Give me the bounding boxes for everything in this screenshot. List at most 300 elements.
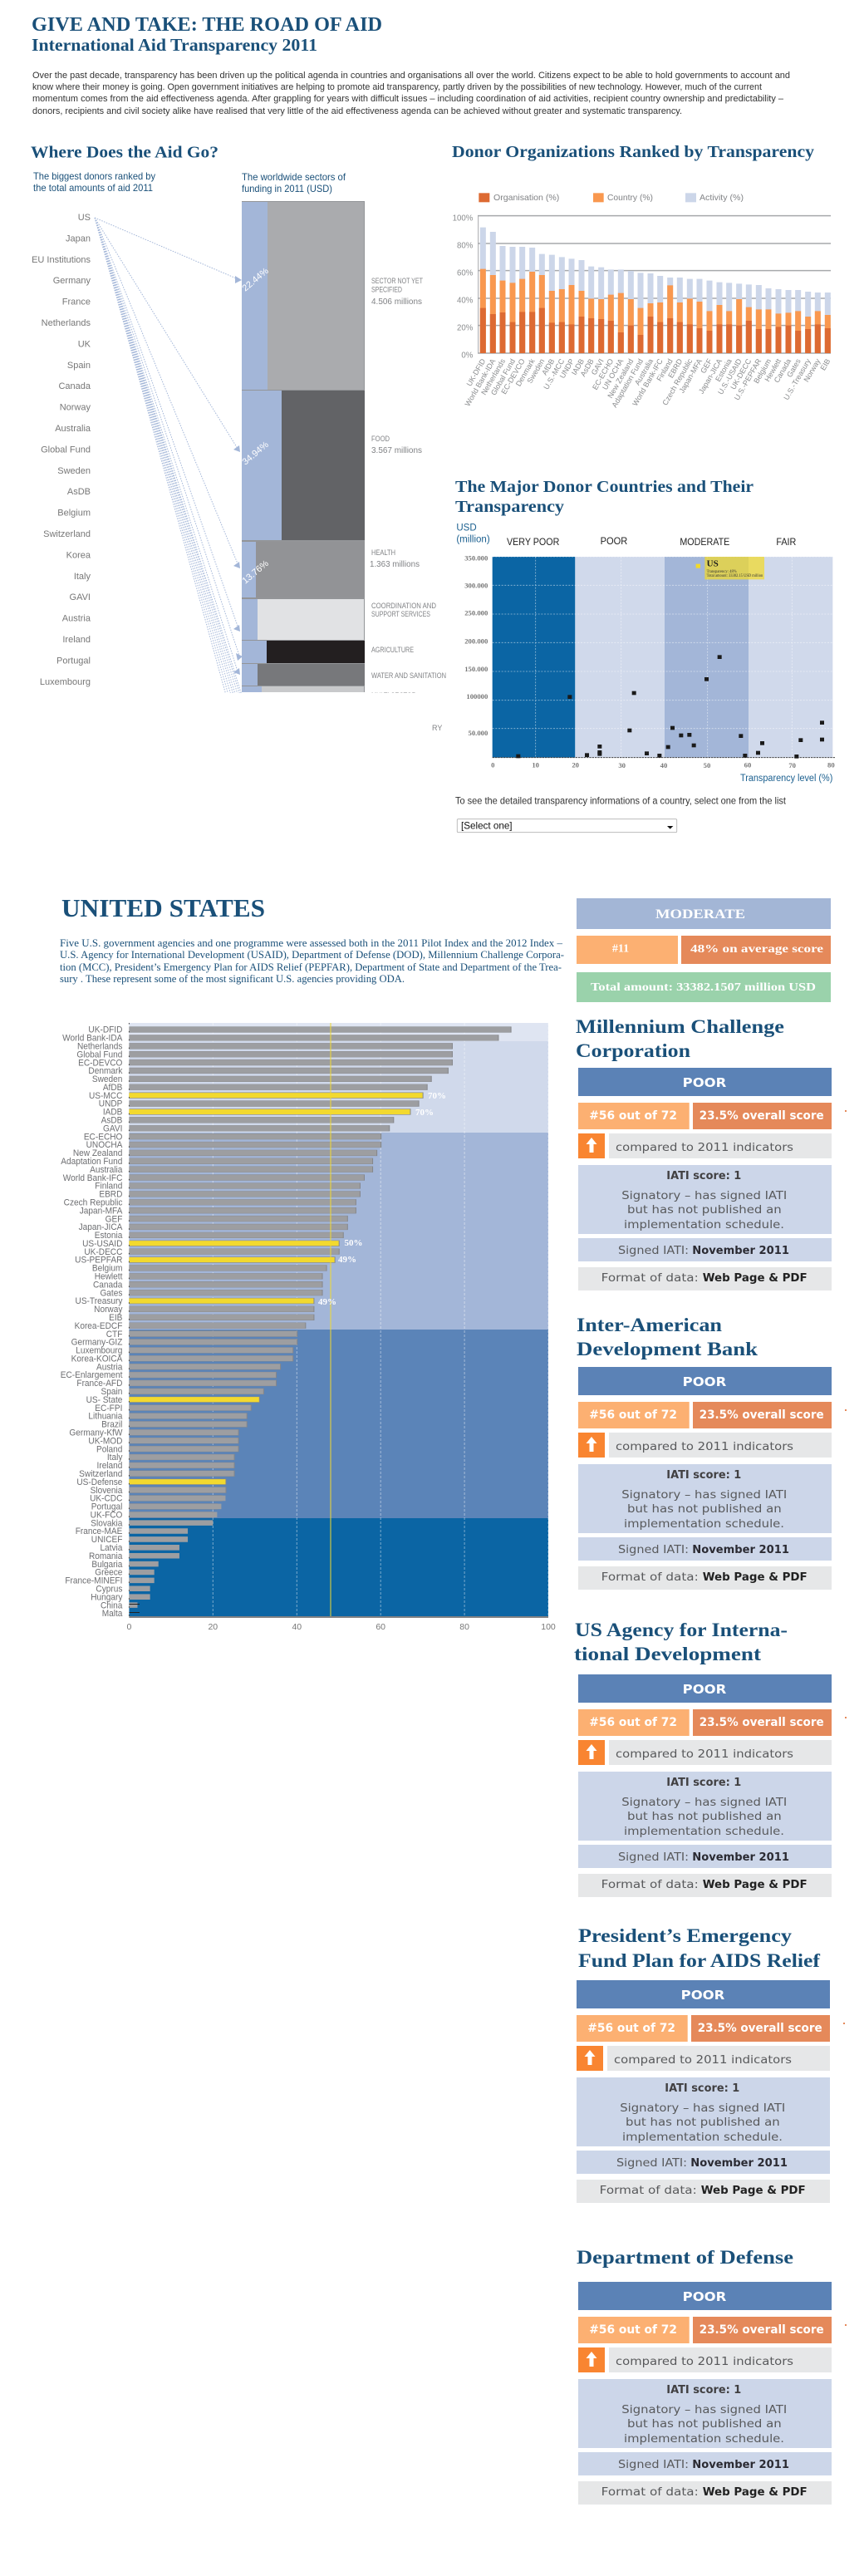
organisation labels: Finland xyxy=(95,1181,123,1192)
caption: biggest donors: the total amounts of aid 2011 xyxy=(33,182,153,194)
organisation names: Adaptation Fund xyxy=(610,357,645,409)
heading: Inter-American Development Bank xyxy=(577,1315,758,1359)
organisation bars xyxy=(483,308,827,353)
caption: worldwide sectors: funding in 2011 (USD) xyxy=(242,183,332,194)
axis xyxy=(129,1023,548,1617)
organisation names: UN OCHA xyxy=(601,357,625,391)
organisation labels: Canada xyxy=(93,1280,123,1290)
organisation labels: World Bank-IDA xyxy=(62,1033,123,1044)
x axis labels: 40 xyxy=(660,761,667,769)
organisation labels: AfDB xyxy=(103,1083,122,1093)
card: Department of Defense: compared to 2011 indicators xyxy=(616,2355,793,2368)
tooltip: US xyxy=(704,557,764,579)
zone titles: VERY POOR xyxy=(507,536,560,548)
card: President's Emergency Fund Plan for AIDS Relief xyxy=(577,1980,845,2203)
organisation names: Czech Republic xyxy=(660,357,695,406)
organisation labels: Poland xyxy=(96,1444,123,1454)
y axis labels: 300.000 xyxy=(464,582,488,590)
axis labels: 40 xyxy=(292,1622,302,1632)
sector labels xyxy=(370,277,446,732)
stacked bar chart: donor organizations xyxy=(453,193,832,409)
organisation names: Belgium xyxy=(752,357,773,385)
sector labels: 3.567 millions xyxy=(371,446,422,455)
organisation labels: China xyxy=(101,1600,123,1610)
zones xyxy=(493,557,835,758)
axis labels: 80 xyxy=(459,1622,469,1632)
organisation labels: Malta xyxy=(102,1609,123,1619)
organisation labels: Greece xyxy=(95,1567,123,1578)
card: Millennium Challenge Corporation: #56 out of 72 xyxy=(589,1109,677,1123)
average score xyxy=(681,936,831,964)
organisation labels xyxy=(61,1025,123,1619)
organisation names: Sweden xyxy=(526,357,546,385)
heading: President's Emergency Fund Plan for AIDS Relief: President’s Emergency xyxy=(578,1925,793,1946)
organisation names: UK-DFID xyxy=(465,357,488,388)
y axis labels: 100000 xyxy=(466,692,488,701)
card: US Agency for International Development: Format of data: xyxy=(601,1878,699,1891)
organisation labels: UNICEF xyxy=(91,1535,123,1545)
organisation names: U.S.-USAID xyxy=(716,357,744,396)
heading: donor organizations: Donor Organizations Ranked by Transparency xyxy=(452,143,814,161)
card: President's Emergency Fund Plan for AIDS Relief: 23.5% overall score xyxy=(698,2022,822,2035)
country paragraph: Five U.S. government agencies and one programme were assessed both in the 2011 Pilot Index and the 2012 Index – xyxy=(60,937,562,949)
organisation labels: EC-DEVCO xyxy=(78,1058,122,1068)
axis labels: 20 xyxy=(208,1622,218,1632)
selection prompt: To see the detailed transparency informations of a country, select one from the list xyxy=(455,796,787,807)
donor list: Netherlands xyxy=(42,318,91,328)
organisation labels: Japan-JICA xyxy=(79,1222,123,1232)
organisation labels: Gates xyxy=(100,1288,122,1298)
activity bars xyxy=(483,228,827,353)
donor list: Austria xyxy=(62,614,91,624)
organisation names: UK-DECC xyxy=(729,357,754,391)
x axis labels: 20 xyxy=(572,760,579,769)
sector labels: COORDINATION AND xyxy=(371,602,436,610)
caption: worldwide sectors xyxy=(242,171,346,194)
y axis labels: 150.000 xyxy=(464,665,488,673)
card: Department of Defense: #56 out of 72 xyxy=(589,2323,677,2337)
organisation names: Canada xyxy=(773,357,793,384)
organisation labels: World Bank-IFC xyxy=(63,1172,123,1183)
card: Inter-American Development Bank: November 2011 xyxy=(692,1543,789,1556)
organisation names: Finland xyxy=(655,357,675,383)
organisation names: Netherlands xyxy=(479,357,507,396)
card: President's Emergency Fund Plan for AIDS Relief: #56 out of 72 xyxy=(587,2022,675,2035)
percentage labels: 70% xyxy=(415,1108,434,1118)
chart legend: Organisation (%) xyxy=(493,194,559,203)
organisation labels: Germany-GIZ xyxy=(71,1337,123,1348)
organisation labels: US-MCC xyxy=(89,1090,123,1101)
organisation names: World Bank-IDA xyxy=(464,357,497,408)
card: Inter-American Development Bank: 23.5% overall score xyxy=(700,1408,824,1422)
organisation names: EC-ECHO xyxy=(591,357,615,391)
organisation labels: UK-FCO xyxy=(91,1510,122,1521)
x axis labels: 0 xyxy=(491,760,494,769)
organisation names: IADB xyxy=(570,357,586,376)
heading: Millennium Challenge Corporation: Corporation xyxy=(576,1040,690,1061)
y axis labels xyxy=(464,553,488,737)
heading: Millennium Challenge Corporation xyxy=(576,1016,784,1061)
organisation labels: GAVI xyxy=(103,1123,122,1134)
sector labels: MULTI SECTOR xyxy=(371,691,416,700)
card: Millennium Challenge Corporation xyxy=(578,1068,847,1290)
donor list: Australia xyxy=(55,424,91,434)
organisation labels: Czech Republic xyxy=(64,1197,122,1208)
donor list: France xyxy=(62,297,91,307)
tooltip: US: Total amount: 33382.15 USD million xyxy=(707,574,763,578)
country paragraph xyxy=(60,937,564,985)
donor list: AsDB xyxy=(67,487,91,497)
organisation labels: Belgium xyxy=(92,1263,123,1274)
organisation labels: UK-MOD xyxy=(88,1436,123,1447)
card: President's Emergency Fund Plan for AIDS Relief: Signed IATI: xyxy=(616,2156,687,2170)
card: Inter-American Development Bank: Web Page & PDF xyxy=(703,1571,808,1584)
country title: UNITED STATES xyxy=(61,893,265,922)
card: Inter-American Development Bank: Signed IATI: xyxy=(618,1543,689,1556)
intro paragraph: momentum comes from the aid effectiveness agenda. After grappling for years with difficult issues – including coordination of aid activities, recipient country ownership and predictability – xyxy=(32,94,784,104)
organisation labels: Slovakia xyxy=(91,1518,123,1528)
percentage labels: 49% xyxy=(338,1255,356,1265)
organisation labels: Australia xyxy=(90,1165,123,1175)
card: US Agency for International Development: November 2011 xyxy=(692,1851,789,1864)
percentage labels xyxy=(318,1091,446,1307)
card: US Agency for International Development: POOR xyxy=(683,1682,727,1697)
organisation labels: Spain xyxy=(101,1387,123,1397)
organisation names: Global Fund xyxy=(489,357,517,396)
organisation labels: Slovenia xyxy=(91,1485,123,1496)
organisation labels: IADB xyxy=(103,1107,122,1118)
percentage labels: 49% xyxy=(318,1297,336,1307)
donor list: Italy xyxy=(74,572,91,582)
card: Department of Defense: November 2011 xyxy=(692,2458,789,2471)
chart legend: Activity (%) xyxy=(700,194,744,203)
country bars xyxy=(483,269,827,353)
sector labels: HEALTH xyxy=(371,548,395,557)
card: Department of Defense: Format of data: xyxy=(601,2485,699,2499)
highlighted point: US xyxy=(696,564,700,568)
average score line xyxy=(330,1023,331,1616)
card: Department of Defense: IATI score: 1 xyxy=(666,2383,741,2397)
organisation labels: Bulgaria xyxy=(91,1559,123,1570)
country summary panel xyxy=(577,898,831,1002)
organisation labels: Sweden xyxy=(92,1074,123,1084)
donor list: EU Institutions xyxy=(32,255,91,265)
x axis labels: 10 xyxy=(532,760,539,769)
donor list: Canada xyxy=(58,381,91,391)
axis labels xyxy=(126,1622,556,1632)
organisation labels: US-PEPFAR xyxy=(75,1255,123,1266)
card: Department of Defense: but has not published an xyxy=(627,2417,782,2431)
card: President's Emergency Fund Plan for AIDS Relief: compared to 2011 indicators xyxy=(614,2053,792,2067)
average score: 48% on average score xyxy=(690,943,823,956)
organisation names: UNDP xyxy=(558,357,576,380)
organisation names: U.S.-PEPFAR xyxy=(733,357,763,401)
organisation labels: Estonia xyxy=(95,1231,123,1241)
organisation names: GEF xyxy=(699,357,714,375)
organisation labels: US-USAID xyxy=(82,1239,123,1249)
card: Department of Defense: Signed IATI: xyxy=(618,2458,689,2471)
tooltip: US: US xyxy=(707,559,719,569)
rating: moderate: MODERATE xyxy=(655,907,745,922)
organisation names: U.S.-MCC xyxy=(542,357,567,391)
organisation labels: UK-DFID xyxy=(88,1025,123,1035)
sector treemap: 13.76% xyxy=(240,558,271,586)
organisation labels: US-Defense xyxy=(76,1477,123,1487)
organisation labels: Norway xyxy=(94,1305,123,1315)
organisation labels: Global Fund xyxy=(76,1050,123,1060)
heading: US Agency for International Development: US Agency for Interna- xyxy=(575,1620,788,1640)
sector labels: FOOD xyxy=(371,435,390,443)
organisation names: EIB xyxy=(818,357,832,372)
rating: moderate xyxy=(577,898,831,929)
intro paragraph: donors, recipients and civil society alike have realised that very little of the aid effectiveness agenda can be achieved without greater and systematic transparency. xyxy=(32,106,682,116)
organisation names: Hewlett xyxy=(763,357,783,383)
organisation names: U.S.-Treasury xyxy=(782,357,812,401)
heading: US Agency for International Development xyxy=(574,1620,788,1664)
organisation names: Japan-JICA xyxy=(697,357,724,396)
card: Millennium Challenge Corporation: Format of data: xyxy=(601,1271,699,1285)
y axis labels: 100% xyxy=(453,214,474,223)
intro paragraph: know where their money is going. Open government initiatives are helping to promote aid transparency, partly driven by the possibilities of new technology. However, much of the current xyxy=(32,82,762,92)
organisation labels: Korea-KOICA xyxy=(71,1354,123,1364)
card: Inter-American Development Bank: Format of data: xyxy=(601,1571,699,1584)
y axis labels xyxy=(453,214,474,361)
card: Millennium Challenge Corporation: 23.5% overall score xyxy=(700,1109,824,1123)
card: US Agency for International Development: Web Page & PDF xyxy=(703,1878,808,1891)
organisation labels: France-MAE xyxy=(76,1526,122,1536)
caption: worldwide sectors: The worldwide sectors of xyxy=(242,171,346,183)
organisation labels: CTF xyxy=(106,1329,123,1340)
organisation labels: New Zealand xyxy=(73,1148,123,1158)
donor list: Norway xyxy=(60,403,91,413)
card: Department of Defense: POOR xyxy=(683,2289,727,2304)
heading: Millennium Challenge Corporation: Millennium Challenge xyxy=(576,1016,784,1037)
sector labels: SUPPORT SERVICES xyxy=(371,610,430,618)
card: US Agency for International Development: compared to 2011 indicators xyxy=(616,1748,793,1761)
organisation names: EBRD xyxy=(666,357,685,380)
card: President's Emergency Fund Plan for AIDS Relief: Web Page & PDF xyxy=(701,2184,806,2197)
organisation labels: France-MINEFI xyxy=(65,1576,122,1586)
x axis labels: 30 xyxy=(618,761,626,769)
organisation labels: UNDP xyxy=(99,1099,122,1109)
subtitle: International Aid Transparency 2011 xyxy=(32,35,317,55)
card: Department of Defense: 23.5% overall score xyxy=(700,2323,824,2337)
donor list: Luxembourg xyxy=(40,677,91,687)
donor list: Portugal xyxy=(56,656,91,666)
organisation labels: Luxembourg xyxy=(76,1345,123,1356)
total amount: Total amount: 33382.1507 million USD xyxy=(591,981,816,994)
sector labels: SECTOR NOT YET xyxy=(371,277,423,285)
y axis labels: 0% xyxy=(461,351,474,361)
organisation names: GAVI xyxy=(590,357,606,376)
card: Inter-American Development Bank xyxy=(578,1367,847,1590)
organisation labels: Netherlands xyxy=(77,1041,122,1052)
organisation labels: Germany-KfW xyxy=(69,1428,122,1438)
organisation names: Estonia xyxy=(714,357,734,383)
sector labels: AGRICULTURE xyxy=(371,646,414,654)
organisation labels: Portugal xyxy=(91,1502,122,1512)
rating zones xyxy=(129,1023,548,1616)
caption: biggest donors: The biggest donors ranked by xyxy=(33,170,155,182)
heading: Inter-American Development Bank: Development Bank xyxy=(577,1339,758,1359)
percentage labels: 70% xyxy=(428,1091,446,1101)
organisation labels: Hungary xyxy=(91,1592,123,1603)
sector labels: 4.506 millions xyxy=(371,297,422,307)
card: Millennium Challenge Corporation: November 2011 xyxy=(692,1244,789,1257)
donor list: Korea xyxy=(66,550,91,560)
organisation names: Japan-MFA xyxy=(677,357,704,395)
organisation labels: US- State xyxy=(86,1395,123,1405)
card: US Agency for International Development: Signed IATI: xyxy=(618,1851,689,1864)
x axis labels xyxy=(491,760,835,769)
organisation names: World Bank-IFC xyxy=(631,357,665,407)
donor list: Ireland xyxy=(62,635,91,645)
sector treemap xyxy=(240,201,365,692)
heading: Department of Defense: Department of Defense xyxy=(577,2247,793,2268)
organisation labels: Ireland xyxy=(97,1461,123,1471)
card: President's Emergency Fund Plan for AIDS Relief: November 2011 xyxy=(690,2156,788,2170)
organisation labels: Romania xyxy=(89,1551,123,1561)
country select box: [Select one] xyxy=(461,821,513,832)
chart legend: Country (%) xyxy=(607,194,653,203)
sector labels: 1.363 millions xyxy=(370,560,420,569)
heading: Inter-American Development Bank: Inter-American xyxy=(577,1315,722,1335)
organisation labels: AsDB xyxy=(101,1115,122,1126)
organisation names: New Zealand xyxy=(606,357,635,400)
country paragraph: tion (MCC), President’s Emergency Plan for AIDS Relief (PEPFAR), Department of State and Department of the Trea- xyxy=(60,961,562,973)
title block xyxy=(32,14,382,55)
y axis labels: 80% xyxy=(457,241,474,250)
organisation labels: Latvia xyxy=(100,1543,123,1553)
organisation names: Norway xyxy=(802,357,822,383)
organisation labels: Adaptation Fund xyxy=(61,1157,123,1167)
intro paragraph xyxy=(32,71,790,116)
country select box xyxy=(457,819,677,833)
donor list: Germany xyxy=(53,276,91,286)
donor list: Spain xyxy=(67,361,91,371)
card: Inter-American Development Bank: IATI score: 1 xyxy=(666,1468,741,1482)
organisation labels: Japan-MFA xyxy=(80,1206,123,1216)
heading: US Agency for International Development: tional Development xyxy=(574,1644,761,1664)
donor list: Sweden xyxy=(57,466,91,476)
organisation labels: Hewlett xyxy=(95,1271,122,1282)
organisation labels: UK-DECC xyxy=(84,1246,123,1257)
organisation names: Gates xyxy=(785,357,803,379)
card: President's Emergency Fund Plan for AIDS Relief: Signatory – has signed IATI xyxy=(620,2102,785,2115)
organisation labels: EC-Enlargement xyxy=(61,1370,122,1380)
card: President's Emergency Fund Plan for AIDS Relief: POOR xyxy=(681,1988,725,2003)
rank xyxy=(577,936,678,964)
card: President's Emergency Fund Plan for AIDS Relief: Format of data: xyxy=(600,2184,697,2197)
card: US Agency for International Development: #56 out of 72 xyxy=(589,1716,677,1729)
rank: #11 xyxy=(612,942,629,956)
grey bars xyxy=(129,1030,512,1605)
donor list: GAVI xyxy=(70,592,91,602)
tooltip: US: Transparency: 48% xyxy=(707,570,737,574)
zone titles: MODERATE xyxy=(680,536,729,548)
card: US Agency for International Development: Signatory – has signed IATI xyxy=(621,1796,787,1809)
organisation names: Australia xyxy=(633,357,655,386)
percentage labels: 50% xyxy=(344,1238,362,1248)
heading: President's Emergency Fund Plan for AIDS Relief xyxy=(578,1925,820,1971)
x axis title: Transparency level (%) xyxy=(740,772,832,784)
chart legend xyxy=(479,193,744,203)
card: Millennium Challenge Corporation: but has not published an xyxy=(627,1203,782,1217)
donor to sector dotted arrows xyxy=(95,218,243,698)
highlighted US agency bars xyxy=(129,1095,423,1482)
organisation labels: Lithuania xyxy=(88,1411,123,1422)
heading: major donor countries: The Major Donor Countries and Their xyxy=(455,478,754,496)
organisation labels: Switzerland xyxy=(79,1469,123,1479)
total amount xyxy=(577,972,831,1002)
card: Millennium Challenge Corporation: POOR xyxy=(683,1075,727,1090)
sector labels: WATER AND SANITATION xyxy=(371,671,446,680)
organisation labels: US-Treasury xyxy=(76,1296,123,1306)
card: Millennium Challenge Corporation: Web Page & PDF xyxy=(703,1271,808,1285)
data points xyxy=(516,655,824,759)
donor list: Belgium xyxy=(57,509,91,519)
y axis labels: 350.000 xyxy=(464,553,488,562)
card: President's Emergency Fund Plan for AIDS Relief: implementation schedule. xyxy=(622,2131,783,2144)
x axis labels: 60 xyxy=(744,760,751,769)
organisation labels: Denmark xyxy=(88,1066,123,1076)
caption: biggest donors xyxy=(33,170,155,194)
sector treemap: 34.94% xyxy=(240,440,271,467)
x axis labels: 80 xyxy=(827,760,835,769)
organisation labels: Italy xyxy=(107,1453,123,1463)
axis labels: 0 xyxy=(126,1622,131,1632)
heading: major donor countries: Transparency xyxy=(455,498,564,516)
clip mask below treemap xyxy=(0,693,431,743)
card: Millennium Challenge Corporation: Signatory – has signed IATI xyxy=(621,1189,787,1202)
y axis title: (million) xyxy=(456,533,490,545)
donor list: UK xyxy=(78,339,91,349)
organisation labels: Korea-EDCF xyxy=(75,1321,123,1331)
card: Inter-American Development Bank: implementation schedule. xyxy=(624,1517,784,1531)
card: Inter-American Development Bank: #56 out of 72 xyxy=(589,1408,677,1422)
scatter plot: transparency vs aid xyxy=(455,521,835,833)
donor list: US xyxy=(78,213,91,223)
card: Millennium Challenge Corporation: IATI score: 1 xyxy=(666,1169,741,1182)
card: Department of Defense: Web Page & PDF xyxy=(703,2485,808,2499)
main title: GIVE AND TAKE: THE ROAD OF AID xyxy=(32,14,382,36)
organisation labels: Austria xyxy=(96,1362,123,1372)
sector labels: RY xyxy=(432,724,442,732)
organisation labels: EIB xyxy=(109,1313,122,1323)
country paragraph: sury . These represent some of the most significant U.S. agencies providing ODA. xyxy=(60,972,405,985)
card: President's Emergency Fund Plan for AIDS Relief: IATI score: 1 xyxy=(665,2082,739,2095)
organisation labels: France-AFD xyxy=(76,1379,123,1389)
intro paragraph: Over the past decade, transparency has been driven up the political agenda in countries and organisations all over the world. Citizens expect to be able to hold governments to account and xyxy=(32,71,790,81)
horizontal bar chart: all organisations xyxy=(61,1023,556,1632)
country paragraph: U.S. Agency for International Development (USAID), Department of Defense (DOD), Millennium Challenge Corpora- xyxy=(60,948,564,961)
y axis labels: 200.000 xyxy=(464,637,488,646)
card: Inter-American Development Bank: POOR xyxy=(683,1374,727,1389)
card: US Agency for International Development xyxy=(578,1674,847,1897)
card: Inter-American Development Bank: Signatory – has signed IATI xyxy=(621,1488,787,1502)
card: Inter-American Development Bank: compared to 2011 indicators xyxy=(616,1440,793,1453)
axis labels: 100 xyxy=(541,1622,556,1632)
x axis labels: 70 xyxy=(788,761,796,769)
card: Millennium Challenge Corporation: compared to 2011 indicators xyxy=(616,1141,793,1154)
card: US Agency for International Development: implementation schedule. xyxy=(624,1825,784,1838)
organisation names: Denmark xyxy=(514,357,537,388)
heading: major donor countries xyxy=(455,478,754,516)
organisation labels: UK-CDC xyxy=(90,1493,123,1504)
organisation names xyxy=(464,357,832,409)
sector labels: SPECIFIED xyxy=(371,286,402,294)
card: US Agency for International Development: 23.5% overall score xyxy=(700,1716,824,1729)
